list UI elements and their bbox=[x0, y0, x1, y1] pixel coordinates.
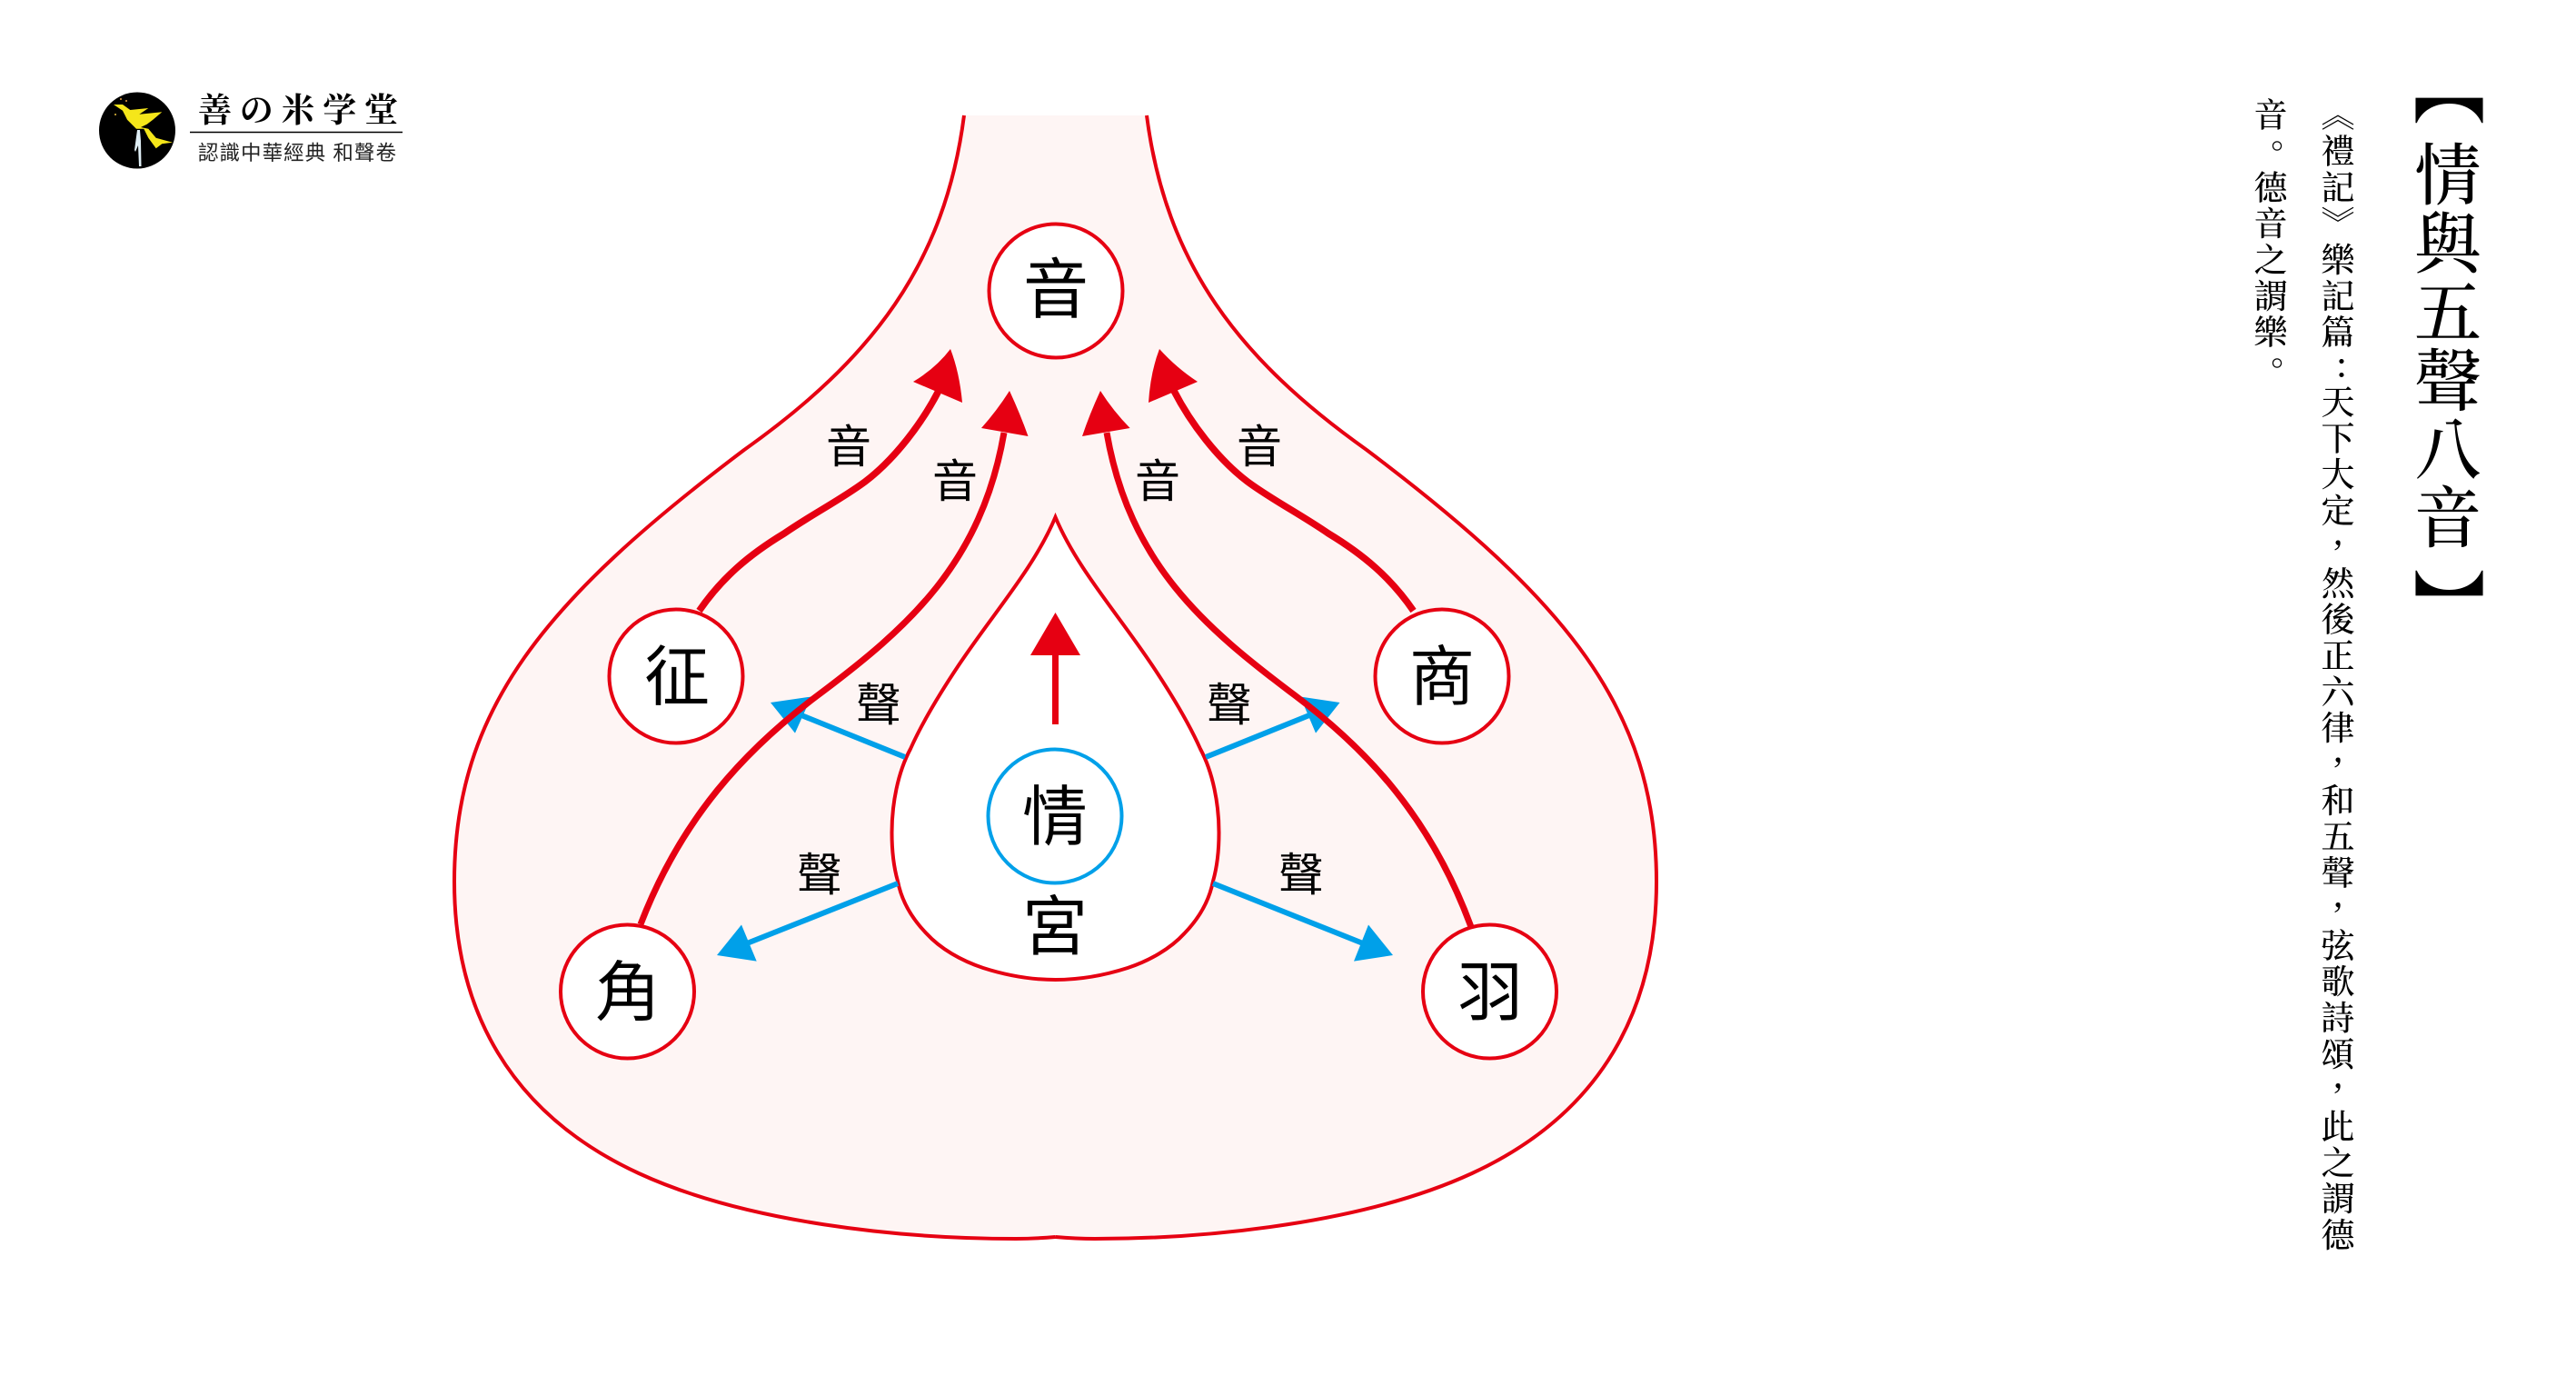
label: 音 left outer: 音 bbox=[826, 422, 871, 473]
node: 角: 角 bbox=[595, 957, 661, 1030]
label: 聲 upper left: 聲 bbox=[856, 680, 901, 731]
logo: brand name: 善の米学堂 bbox=[198, 92, 398, 130]
logo: phoenix emblem bbox=[99, 93, 175, 169]
node: 情 bbox=[989, 749, 1121, 883]
logo: divider bbox=[190, 131, 403, 133]
label: 宮: 宮 bbox=[1022, 892, 1088, 964]
blue arrow: upper left 聲 bbox=[771, 696, 905, 757]
title: top bracket: 【 bbox=[2402, 53, 2482, 125]
label: 聲 upper right: 聲 bbox=[1207, 680, 1252, 731]
node: 征 bbox=[609, 609, 743, 743]
node: 音 bbox=[989, 224, 1123, 358]
vase outline: 音 vessel bbox=[454, 115, 1656, 1239]
node: 羽 bbox=[1423, 925, 1557, 1058]
red arrow: 角 to 音 bbox=[641, 391, 1029, 924]
title: vertical heading: 情與五聲八音 bbox=[2404, 140, 2479, 551]
node: 商: 商 bbox=[1409, 642, 1475, 714]
node: 音: 音 bbox=[1023, 254, 1089, 327]
text block: quotation column two: 音。 德音之謂樂。 bbox=[2248, 97, 2292, 383]
label: 聲 lower left: 聲 bbox=[797, 850, 842, 901]
blue arrow: upper right 聲 bbox=[1206, 696, 1339, 757]
teardrop: 宮 bbox=[892, 517, 1219, 980]
blue arrow: lower right 聲 bbox=[1213, 883, 1393, 962]
red arrow: 羽 to 音 bbox=[1082, 391, 1471, 927]
blue arrow: lower left 聲 bbox=[717, 883, 898, 962]
node: 羽: 羽 bbox=[1457, 957, 1523, 1030]
node: 角 bbox=[561, 925, 694, 1058]
red arrow: 征 to 音 bbox=[700, 349, 962, 611]
node: 征: 征 bbox=[644, 642, 710, 714]
logo: subtitle: 認識中華經典 和聲卷 bbox=[198, 142, 396, 165]
title: bottom bracket: 】 bbox=[2402, 568, 2482, 641]
label: 音 left inner: 音 bbox=[932, 456, 978, 507]
label: 音 right inner: 音 bbox=[1135, 456, 1180, 507]
label: 聲 lower right: 聲 bbox=[1278, 850, 1324, 901]
node: 商 bbox=[1376, 609, 1508, 743]
node: 情: 情 bbox=[1022, 782, 1088, 854]
text block: quotation column one: 《禮記》樂記篇 ： 天下大定，然後正六律，和五聲，弦歌詩頌，此之謂德 bbox=[2315, 97, 2367, 1253]
red arrow: 情 upward bbox=[1030, 613, 1080, 724]
label: 音 right outer: 音 bbox=[1237, 422, 1282, 473]
red arrow: 商 to 音 bbox=[1149, 349, 1414, 611]
